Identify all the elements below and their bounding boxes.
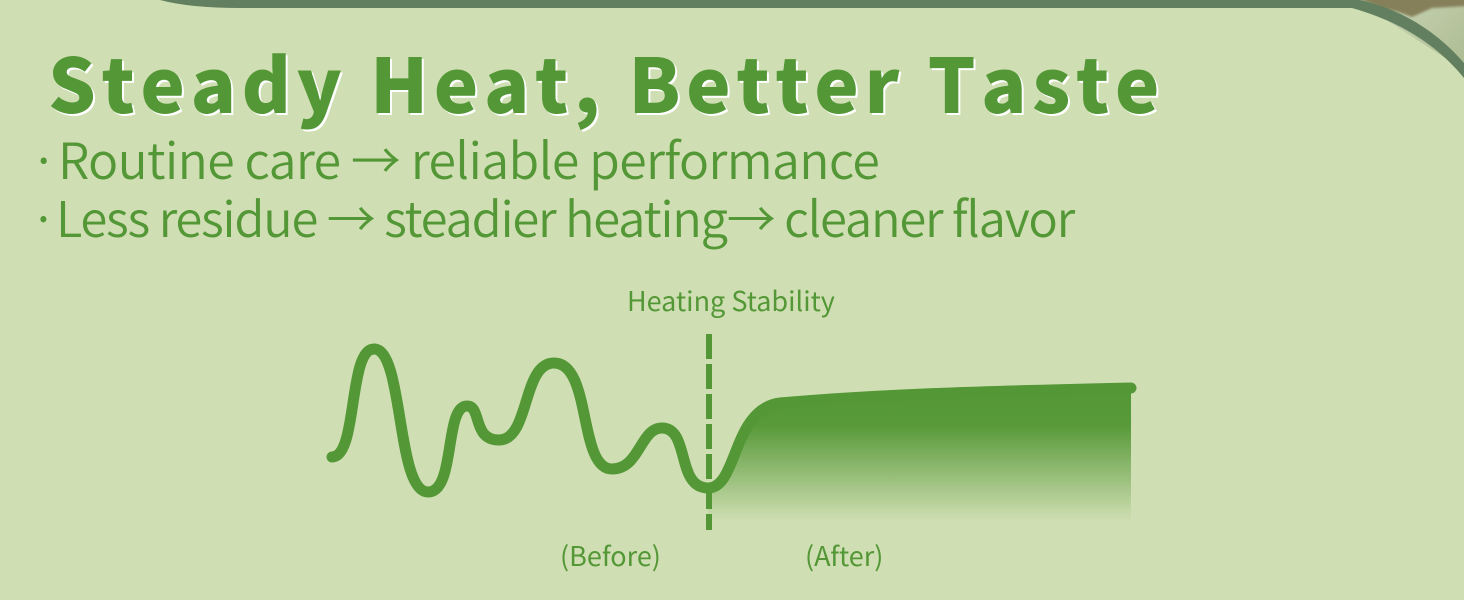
- bullet: routine care: [30, 122, 879, 194]
- after label: (After): [805, 535, 883, 574]
- text: Routine care → reliable performance: [58, 122, 879, 194]
- chart title: Heating Stability: [627, 280, 835, 319]
- text: ·: [30, 122, 57, 194]
- before and after curve: [332, 349, 1131, 492]
- title: Steady Heat, Better Taste: [48, 26, 1165, 135]
- text: Less residue → steadier heating→ cleaner flavor: [56, 181, 1074, 252]
- text: ·: [30, 181, 56, 252]
- bullet: less residue: [30, 181, 1076, 252]
- after area fill: [708, 388, 1131, 522]
- dashed divider: [706, 334, 712, 530]
- before label: (Before): [560, 535, 661, 574]
